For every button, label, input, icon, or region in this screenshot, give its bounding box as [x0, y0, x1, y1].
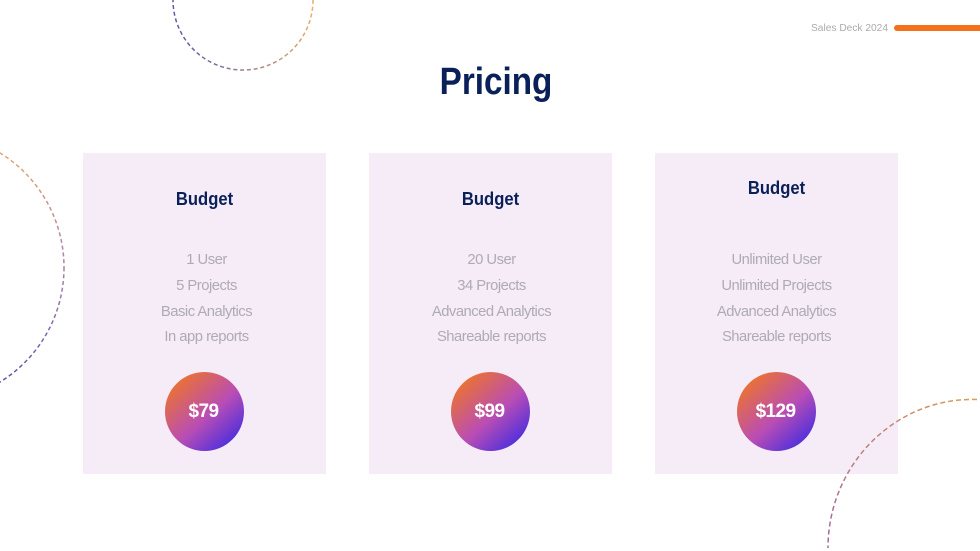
feature list: Advanced Analytics — [717, 304, 836, 320]
plan name: Budget — [176, 188, 233, 209]
feature list — [161, 252, 252, 345]
panel: pricing card 2 — [369, 153, 612, 474]
price badge — [737, 372, 816, 451]
feature list: 20 User — [467, 252, 516, 268]
feature list: 1 User — [186, 252, 227, 268]
panel: pricing card 3 — [655, 153, 898, 474]
feature list: 34 Projects — [457, 278, 526, 294]
plan name: Budget — [748, 177, 805, 198]
price badge: $99 — [475, 401, 504, 422]
feature list: Shareable reports — [437, 329, 546, 345]
feature list: 5 Projects — [176, 278, 237, 294]
feature list: Basic Analytics — [161, 304, 252, 320]
header label: Sales Deck 2024: Sales Deck 2024 — [811, 23, 888, 34]
feature list: In app reports — [164, 329, 249, 345]
panel: pricing card 1 — [83, 153, 326, 474]
feature list: Shareable reports — [722, 329, 831, 345]
feature list: Unlimited User — [731, 252, 822, 268]
price badge: $129 — [756, 401, 795, 422]
price badge: $79 — [189, 401, 218, 422]
feature list: Unlimited Projects — [721, 278, 832, 294]
feature list — [432, 252, 552, 345]
title: Pricing — [440, 61, 552, 103]
plan name: Budget — [462, 188, 519, 209]
price badge — [165, 372, 244, 451]
price badge — [451, 372, 530, 451]
feature list: Advanced Analytics — [432, 304, 551, 320]
feature list — [717, 252, 836, 345]
header accent bar — [894, 25, 980, 31]
